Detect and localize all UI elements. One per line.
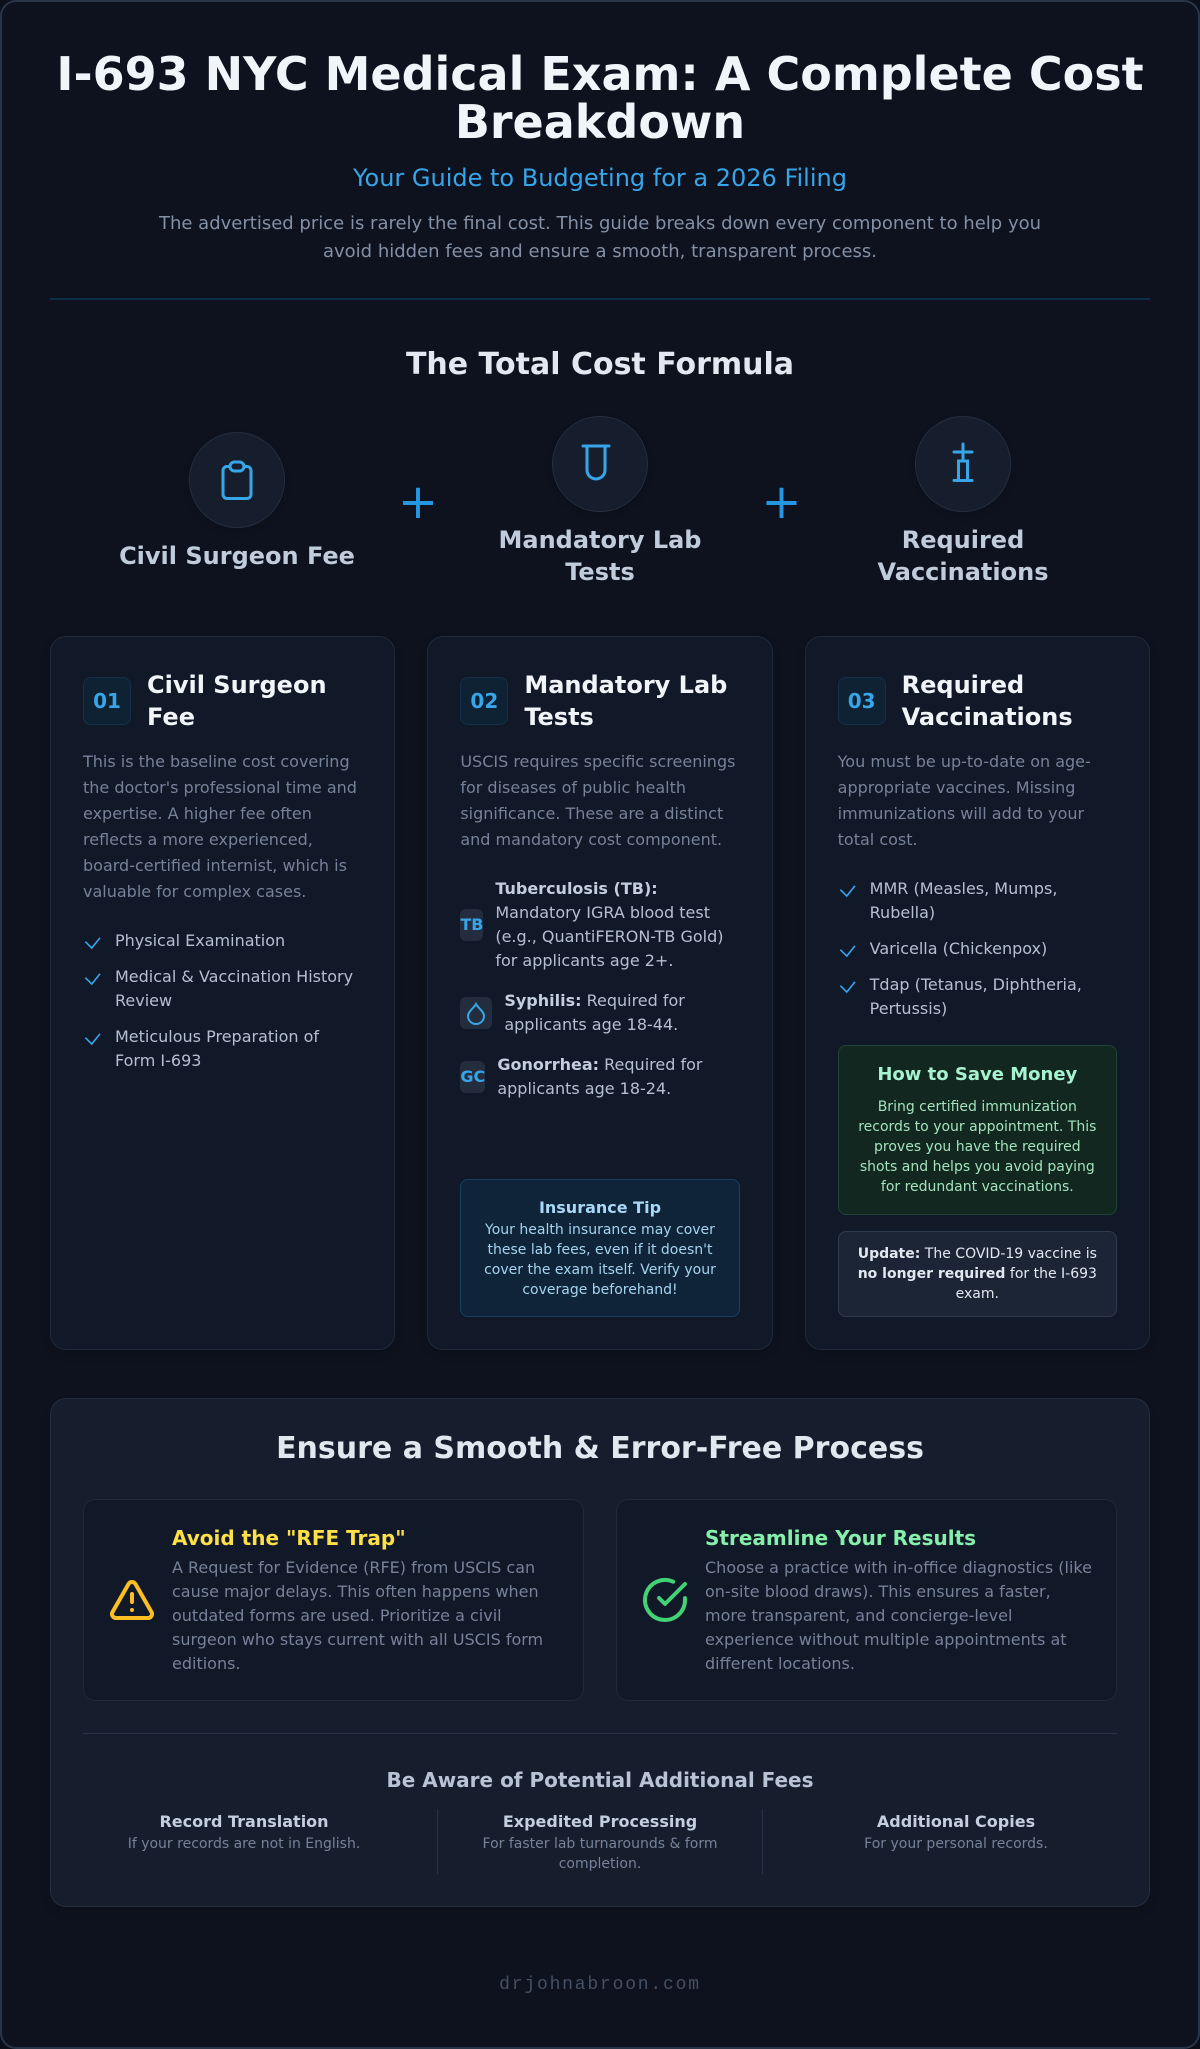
intro text: avoid hidden fees and ensure a smooth, transparent process.	[323, 241, 877, 262]
description: expertise. A higher fee often	[83, 804, 312, 823]
lab item: gonorrhea	[460, 1055, 702, 1098]
list item: Tdap	[840, 975, 1082, 1018]
card heading	[902, 671, 1073, 731]
callout: insurance tip	[460, 1179, 740, 1317]
panel heading: Ensure a Smooth & Error-Free Process	[276, 1431, 924, 1466]
card heading	[524, 671, 727, 731]
number badge 01: 01	[93, 689, 121, 713]
list item: MMR: Rubella)	[870, 903, 935, 922]
lab item: gonorrhea: GC	[460, 1067, 485, 1086]
body text: different locations.	[705, 1654, 855, 1673]
body text: editions.	[172, 1654, 241, 1673]
list item: form preparation	[84, 1027, 320, 1070]
callout: how to save money: records to your appointment. This	[858, 1119, 1096, 1135]
fee: expedited processing	[483, 1812, 717, 1872]
body text: cause major delays. This often happens when	[172, 1582, 539, 1601]
callout: insurance tip: Insurance Tip	[539, 1198, 661, 1217]
callout: covid update: no longer required for the I-693	[858, 1266, 1097, 1282]
body text: on-site blood draws). This ensures a faster,	[705, 1582, 1051, 1601]
card heading: Fee	[147, 703, 195, 731]
label: required vaccinations: Required	[902, 526, 1024, 554]
callout: insurance tip: Your health insurance may cover	[485, 1222, 715, 1238]
lab item: tuberculosis: Mandatory IGRA blood test	[495, 903, 710, 922]
title	[56, 47, 1144, 149]
footer: website: drjohnabroon.com	[499, 1975, 701, 1995]
body text: Choose a practice with in-office diagnostics (like	[705, 1558, 1092, 1577]
description: appropriate vaccines. Missing	[838, 778, 1075, 797]
subtitle: Your Guide to Budgeting for a 2026 Filing	[353, 164, 847, 192]
description	[82, 752, 357, 901]
panel: required vaccinations	[805, 636, 1150, 1350]
lab item: tuberculosis: (e.g., QuantiFERON-TB Gold)	[495, 927, 723, 946]
number badge 03	[838, 677, 886, 725]
fee: record translation	[128, 1812, 360, 1852]
fee: additional copies: For your personal records.	[864, 1836, 1048, 1852]
lab item: tuberculosis: Tuberculosis (TB):	[495, 879, 658, 898]
icon: syringe	[915, 416, 1011, 512]
callout: insurance tip: these lab fees, even if it doesn't	[487, 1242, 712, 1258]
list item: history review	[84, 967, 353, 1010]
callout: how to save money: shots and helps you avoid paying	[860, 1159, 1095, 1175]
callout: insurance tip: cover the exam itself. Verify your	[484, 1262, 716, 1278]
sub-panel: RFE trap	[83, 1499, 584, 1701]
card heading	[147, 671, 327, 731]
body text	[705, 1558, 1092, 1673]
callout: how to save money: How to Save Money	[877, 1064, 1077, 1085]
lab item: syphilis: Syphilis: Required for	[504, 991, 685, 1010]
number badge 02	[460, 677, 508, 725]
list item: MMR: MMR (Measles, Mumps,	[870, 879, 1057, 898]
description: You must be up-to-date on age-	[838, 752, 1091, 771]
number badge 03: 03	[848, 689, 876, 713]
heading: additional fees: Be Aware of Potential Additional Fees	[386, 1768, 814, 1792]
description: reflects a more experienced,	[83, 830, 313, 849]
sub-panel: streamline results	[616, 1499, 1117, 1701]
body text: outdated forms are used. Prioritize a civil	[172, 1606, 502, 1625]
description: and mandatory cost component.	[460, 830, 722, 849]
callout: covid update: Update: The COVID-19 vaccine is	[858, 1246, 1097, 1262]
lab item: tuberculosis: TB	[460, 915, 483, 934]
lab item: syphilis: applicants age 18-44.	[504, 1015, 678, 1034]
panel: smooth process	[50, 1398, 1150, 1907]
list item: form preparation: Meticulous Preparation of	[115, 1027, 319, 1046]
lab item: syphilis	[460, 991, 685, 1034]
body text: experience without multiple appointments at	[705, 1630, 1067, 1649]
card heading: Vaccinations	[902, 703, 1073, 731]
icon: warning triangle	[110, 1580, 154, 1620]
icon: clipboard	[189, 432, 285, 528]
callout: insurance tip: coverage beforehand!	[522, 1282, 678, 1298]
heading: Avoid the "RFE Trap"	[172, 1526, 406, 1550]
label: mandatory lab tests: Mandatory Lab	[498, 526, 702, 554]
intro text	[158, 213, 1041, 262]
icon: check circle	[642, 1578, 688, 1622]
fee: expedited processing: For faster lab turnarounds & form	[483, 1836, 717, 1852]
list item: history review: Review	[115, 991, 172, 1010]
label: mandatory lab tests: Tests	[565, 558, 635, 586]
list item: MMR	[840, 879, 1057, 922]
label: civil surgeon fee: Civil Surgeon Fee	[119, 542, 355, 570]
lab item: tuberculosis: for applicants age 2+.	[495, 951, 673, 970]
icon: test tube	[552, 416, 648, 512]
heading: total cost formula: The Total Cost Formula	[406, 347, 794, 382]
lab item: gonorrhea: applicants age 18-24.	[497, 1079, 671, 1098]
number badge 01	[83, 677, 131, 725]
list item: Tdap: Pertussis)	[870, 999, 947, 1018]
card heading: Required	[902, 671, 1024, 699]
fee: additional copies: Additional Copies	[877, 1812, 1035, 1831]
fee: additional copies	[864, 1812, 1048, 1852]
callout: covid update	[838, 1231, 1117, 1317]
description: USCIS requires specific screenings	[460, 752, 735, 771]
list item: Tdap: Tdap (Tetanus, Diphtheria,	[870, 975, 1082, 994]
description: board-certified internist, which is	[83, 856, 347, 875]
intro text: The advertised price is rarely the final cost. This guide breaks down every component to help you	[159, 213, 1041, 234]
number badge 02: 02	[470, 689, 498, 713]
card heading: Mandatory Lab	[524, 671, 727, 699]
callout: how to save money: Bring certified immunization	[878, 1099, 1077, 1115]
description	[838, 752, 1091, 849]
description: the doctor's professional time and	[83, 778, 357, 797]
callout: how to save money	[838, 1045, 1117, 1215]
label: required vaccinations: Vaccinations	[878, 558, 1048, 586]
list item: physical examination: Physical Examination	[115, 931, 285, 950]
description: for diseases of public health	[460, 778, 686, 797]
label: required vaccinations	[878, 526, 1048, 586]
description	[460, 752, 735, 849]
title: I-693 NYC Medical Exam: A Complete Cost	[56, 47, 1144, 101]
body text: more transparent, and concierge-level	[705, 1606, 1012, 1625]
body text: A Request for Evidence (RFE) from USCIS can	[172, 1558, 535, 1577]
body text: surgeon who stays current with all USCIS form	[172, 1630, 543, 1649]
fee: record translation: If your records are not in English.	[128, 1836, 360, 1852]
fee: expedited processing: completion.	[559, 1856, 641, 1872]
panel: mandatory lab tests	[427, 636, 773, 1350]
list item: history review: Medical & Vaccination History	[115, 967, 353, 986]
operator: plus: +	[398, 474, 438, 530]
lab item: tuberculosis	[460, 879, 723, 970]
card heading: Civil Surgeon	[147, 671, 327, 699]
callout: how to save money: proves you have the required	[874, 1139, 1081, 1155]
description: total cost.	[838, 830, 918, 849]
callout: how to save money: for redundant vaccinations.	[881, 1179, 1074, 1195]
lab item: gonorrhea: Gonorrhea: Required for	[497, 1055, 702, 1074]
description: valuable for complex cases.	[83, 882, 306, 901]
fee: expedited processing: Expedited Processing	[503, 1812, 697, 1831]
label: mandatory lab tests	[498, 526, 702, 586]
list item: form preparation: Form I-693	[115, 1051, 201, 1070]
callout: covid update: exam.	[956, 1286, 999, 1302]
title: Breakdown	[455, 95, 745, 149]
description: This is the baseline cost covering	[83, 752, 350, 771]
list item: varicella: Varicella (Chickenpox)	[870, 939, 1047, 958]
body text	[172, 1558, 543, 1673]
description: significance. These are a distinct	[460, 804, 723, 823]
operator: plus: +	[761, 474, 802, 530]
description: immunizations will add to your	[838, 804, 1084, 823]
card heading: Tests	[524, 703, 594, 731]
panel: civil surgeon fee	[50, 636, 395, 1350]
heading: Streamline Your Results	[705, 1526, 976, 1550]
fee: record translation: Record Translation	[159, 1812, 329, 1831]
